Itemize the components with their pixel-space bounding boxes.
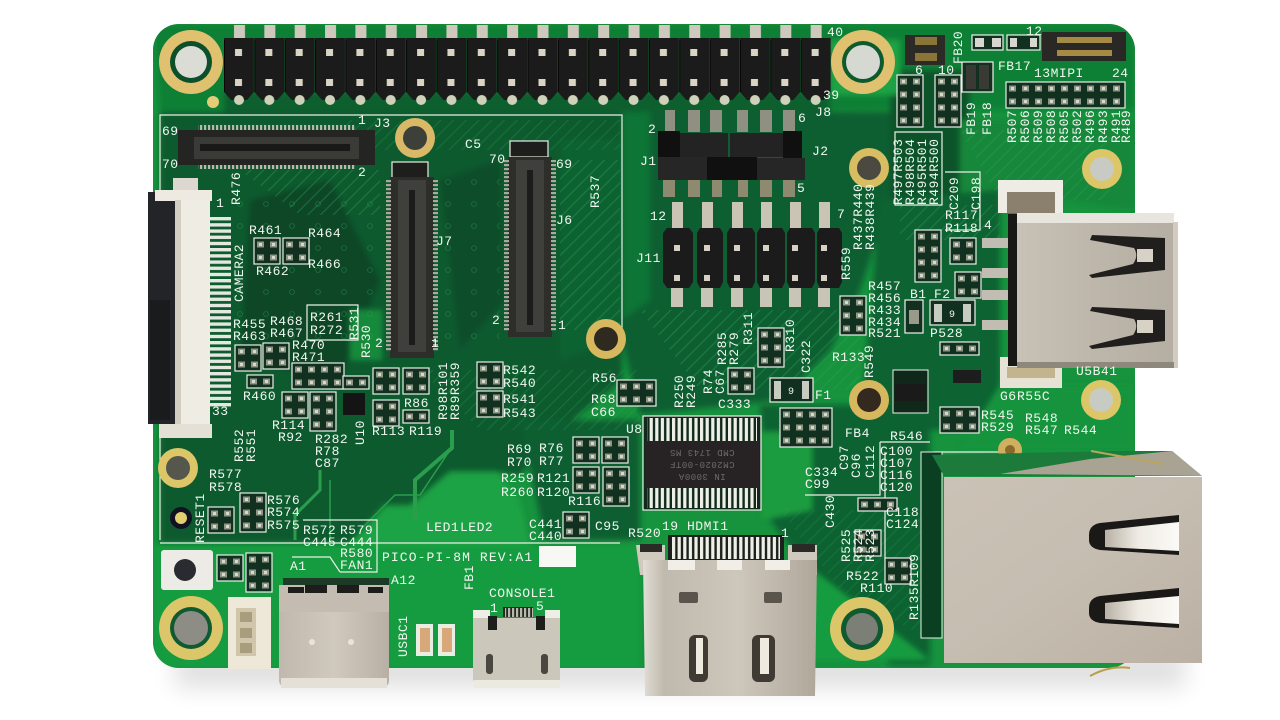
- silkscreen labels: R543: [503, 406, 536, 421]
- silkscreen labels: R120: [537, 485, 570, 500]
- micro-USB console connector: [473, 607, 560, 688]
- USB-A connector: [982, 180, 1178, 388]
- silkscreen labels: R540: [503, 376, 536, 391]
- vertical silkscreen labels: C430: [823, 495, 838, 528]
- silkscreen labels: R542: [503, 363, 536, 378]
- silkscreen labels: FAN1: [340, 558, 373, 573]
- silkscreen labels: R118: [945, 221, 978, 236]
- vertical silkscreen labels: FB20: [951, 31, 966, 64]
- silkscreen labels: 2: [375, 336, 383, 351]
- silkscreen labels: R110: [860, 581, 893, 596]
- silkscreen labels: R119: [409, 424, 442, 439]
- fuses and capacitors: 9: [949, 310, 956, 321]
- silkscreen labels: J7: [436, 234, 453, 249]
- silkscreen labels: R520: [628, 526, 661, 541]
- vertical silkscreen labels: R311: [741, 312, 756, 345]
- silkscreen labels: F1: [815, 388, 832, 403]
- vertical silkscreen labels: R495R501: [915, 139, 930, 205]
- silkscreen labels: R117: [945, 208, 978, 223]
- vertical silkscreen labels: U10: [353, 420, 368, 445]
- silkscreen labels: G6: [1000, 389, 1017, 404]
- connector J6: [504, 141, 556, 337]
- vertical silkscreen labels: R506: [1018, 110, 1033, 143]
- silkscreen labels: R547: [1025, 423, 1058, 438]
- U8 IC chip: [643, 416, 761, 510]
- silkscreen labels: R548: [1025, 411, 1058, 426]
- RJ45 ethernet connector: [921, 451, 1202, 676]
- silkscreen labels: C333: [718, 397, 751, 412]
- silkscreen labels: R272: [310, 323, 343, 338]
- silkscreen labels: C66: [591, 405, 616, 420]
- silkscreen labels: 70: [162, 157, 179, 172]
- silkscreen labels: C116: [880, 468, 913, 483]
- silkscreen labels: 24: [1112, 66, 1129, 81]
- vertical silkscreen labels: C112: [863, 445, 878, 478]
- vertical silkscreen labels: FB18: [980, 102, 995, 135]
- vertical silkscreen labels: R489: [1119, 110, 1134, 143]
- vertical silkscreen labels: R502: [1070, 110, 1085, 143]
- vertical silkscreen labels: C96: [849, 453, 864, 478]
- silkscreen labels: R580: [340, 546, 373, 561]
- vertical silkscreen labels: R249: [684, 375, 699, 408]
- vertical silkscreen labels: RESET1: [193, 493, 208, 543]
- vertical silkscreen labels: USBC1: [396, 615, 411, 657]
- silkscreen labels: 5: [797, 181, 805, 196]
- jumper header J11: [663, 202, 842, 307]
- HDMI connector: [636, 535, 817, 696]
- silkscreen labels: R576: [267, 493, 300, 508]
- silkscreen labels: R77: [539, 454, 564, 469]
- connector J3: [178, 125, 375, 169]
- silkscreen labels: R456: [868, 291, 901, 306]
- silkscreen labels: HDMI1: [687, 519, 729, 534]
- silkscreen labels: R541: [503, 392, 536, 407]
- silkscreen labels: R76: [539, 441, 564, 456]
- vertical silkscreen labels: R285: [715, 332, 730, 365]
- silkscreen labels: F2: [934, 287, 951, 302]
- silkscreen labels: C5: [465, 137, 482, 152]
- vertical silkscreen labels: R505: [1057, 110, 1072, 143]
- fuses and capacitors: 9: [788, 387, 795, 398]
- vertical silkscreen labels: R508: [1044, 110, 1059, 143]
- silkscreen labels: R70: [507, 455, 532, 470]
- silkscreen labels: 19: [662, 519, 679, 534]
- vertical silkscreen labels: [193, 31, 1134, 657]
- silkscreen labels: J3: [374, 116, 391, 131]
- 40-pin GPIO header J8: [224, 24, 831, 108]
- vertical silkscreen labels: C67: [713, 369, 728, 394]
- FPC camera connector: [148, 178, 231, 438]
- silkscreen labels: 1: [558, 318, 566, 333]
- silkscreen labels: [162, 24, 1129, 616]
- silkscreen labels: 2: [492, 313, 500, 328]
- silkscreen labels: R455: [233, 317, 266, 332]
- silkscreen component pads: [208, 75, 1125, 592]
- silkscreen labels: 33: [212, 404, 229, 419]
- USB-C connector: [279, 578, 389, 688]
- U8 IC chip: CM2020-00TF: [670, 459, 734, 469]
- silkscreen labels: R457: [868, 279, 901, 294]
- vertical silkscreen labels: R523: [863, 529, 878, 562]
- vertical silkscreen labels: FB1: [462, 565, 477, 590]
- silkscreen labels: J1: [640, 154, 657, 169]
- silkscreen labels: C120: [880, 480, 913, 495]
- board drop shadow: [175, 650, 1185, 688]
- silkscreen labels: C107: [880, 456, 913, 471]
- silkscreen labels: R577: [209, 467, 242, 482]
- silkscreen labels: A12: [391, 573, 416, 588]
- silkscreen labels: R261: [310, 310, 343, 325]
- vertical silkscreen labels: R496: [1083, 110, 1098, 143]
- silkscreen labels: R521: [868, 326, 901, 341]
- vertical silkscreen labels: R498R504: [903, 139, 918, 205]
- JST fan connector: [228, 597, 271, 669]
- silkscreen labels: R522: [846, 569, 879, 584]
- silkscreen labels: 6: [915, 63, 923, 78]
- U8 IC chip: IN 3000A: [678, 471, 726, 481]
- vertical silkscreen labels: R476: [229, 172, 244, 205]
- silkscreen labels: 40: [827, 25, 844, 40]
- small QFN chips and regulators: [343, 32, 1126, 415]
- silkscreen labels: C124: [886, 517, 919, 532]
- silkscreen labels: R470: [292, 338, 325, 353]
- silkscreen labels: R55C: [1017, 389, 1050, 404]
- silkscreen outlines: [160, 115, 1010, 572]
- vertical silkscreen labels: R507: [1005, 110, 1020, 143]
- vertical silkscreen labels: R509: [1031, 110, 1046, 143]
- mounting hole: bottom right: [830, 597, 894, 661]
- silkscreen labels: FB4: [845, 426, 870, 441]
- silkscreen labels: C334: [805, 465, 838, 480]
- silkscreen labels: R86: [404, 396, 429, 411]
- silkscreen labels: R574: [267, 505, 300, 520]
- silkscreen labels: 1: [781, 526, 789, 541]
- silkscreen labels: R467: [270, 326, 303, 341]
- silkscreen labels: LED2: [460, 520, 493, 535]
- mounting hole: top centre-right: [831, 30, 895, 94]
- silkscreen labels: R471: [292, 350, 325, 365]
- plated holes: [158, 96, 1122, 529]
- silkscreen labels: B1: [910, 287, 927, 302]
- silkscreen labels: 5: [536, 599, 544, 614]
- silkscreen labels: R464: [308, 226, 341, 241]
- vertical silkscreen labels: R250: [672, 375, 687, 408]
- vertical silkscreen labels: C97: [837, 445, 852, 470]
- silkscreen labels: PICO-PI-8M REV:A1: [382, 550, 533, 565]
- silkscreen labels: R113: [372, 424, 405, 439]
- silkscreen labels: U5B41: [1076, 364, 1118, 379]
- silkscreen labels: R572: [303, 523, 336, 538]
- silkscreen labels: C99: [805, 477, 830, 492]
- silkscreen labels: 69: [162, 124, 179, 139]
- silkscreen labels: R69: [507, 442, 532, 457]
- silkscreen labels: 12: [650, 209, 667, 224]
- silkscreen labels: R544: [1064, 423, 1097, 438]
- vertical silkscreen labels: R537: [588, 175, 603, 208]
- silkscreen labels: J6: [556, 213, 573, 228]
- vertical silkscreen labels: C198: [969, 177, 984, 210]
- vertical silkscreen labels: R552: [232, 429, 247, 462]
- vertical silkscreen labels: R493: [1096, 110, 1111, 143]
- vertical silkscreen labels: R74: [701, 369, 716, 394]
- silkscreen labels: R116: [568, 494, 601, 509]
- connector J7: [386, 162, 438, 358]
- silkscreen labels: 1: [358, 113, 366, 128]
- PCB photograph recreated as a scene: [148, 24, 1202, 696]
- silkscreen labels: R68: [591, 392, 616, 407]
- silkscreen labels: 1: [490, 601, 498, 616]
- silkscreen labels: R259: [501, 471, 534, 486]
- silkscreen labels: 12: [1026, 24, 1043, 39]
- vertical silkscreen labels: C322: [799, 340, 814, 373]
- silkscreen labels: R121: [537, 471, 570, 486]
- silkscreen labels: 7: [837, 207, 845, 222]
- mounting hole: top left: [159, 30, 223, 94]
- silkscreen labels: J11: [636, 251, 661, 266]
- silkscreen labels: R461: [249, 223, 282, 238]
- silkscreen labels: R578: [209, 480, 242, 495]
- silkscreen labels: 2: [648, 122, 656, 137]
- silkscreen labels: CONSOLE1: [489, 586, 555, 601]
- vertical silkscreen labels: R98R101: [436, 362, 451, 420]
- silkscreen labels: R575: [267, 518, 300, 533]
- vertical silkscreen labels: R531: [347, 307, 362, 340]
- silkscreen labels: 2: [358, 165, 366, 180]
- silkscreen labels: 70: [489, 152, 506, 167]
- vertical silkscreen labels: R494R500: [927, 139, 942, 205]
- vertical silkscreen labels: C209: [947, 177, 962, 210]
- status LEDs: [416, 624, 455, 656]
- silkscreen labels: R468: [270, 314, 303, 329]
- vertical silkscreen labels: R310: [783, 319, 798, 352]
- vertical silkscreen labels: R438R439: [863, 184, 878, 250]
- vertical silkscreen labels: R279: [727, 332, 742, 365]
- silkscreen labels: FB17: [998, 59, 1031, 74]
- silkscreen labels: R579: [340, 523, 373, 538]
- vertical silkscreen labels: R135R109: [907, 554, 922, 620]
- silkscreen labels: C118: [886, 505, 919, 520]
- vertical silkscreen labels: R551: [244, 429, 259, 462]
- silkscreen labels: R260: [501, 485, 534, 500]
- silkscreen labels: 13MIPI: [1034, 66, 1084, 81]
- vertical silkscreen labels: R525: [839, 529, 854, 562]
- silkscreen labels: U8: [626, 422, 643, 437]
- fuses and capacitors: [770, 300, 975, 402]
- silkscreen labels: R434: [868, 315, 901, 330]
- white label block on board: [539, 546, 576, 567]
- reset push button: [161, 550, 213, 590]
- silkscreen labels: R56: [592, 371, 617, 386]
- silkscreen labels: R92: [278, 430, 303, 445]
- silkscreen labels: R282: [315, 432, 348, 447]
- silkscreen labels: 4: [984, 218, 992, 233]
- vertical silkscreen labels: R559: [839, 247, 854, 280]
- vertical silkscreen labels: R549: [862, 345, 877, 378]
- silkscreen labels: 10: [938, 63, 955, 78]
- trace hatching: [230, 120, 1110, 640]
- silkscreen labels: R462: [256, 264, 289, 279]
- silkscreen labels: P528: [930, 326, 963, 341]
- vertical silkscreen labels: R89R359: [448, 362, 463, 420]
- silkscreen labels: 6: [798, 111, 806, 126]
- silkscreen labels: R546: [890, 429, 923, 444]
- silkscreen labels: C87: [315, 456, 340, 471]
- silkscreen labels: LED1: [426, 520, 459, 535]
- vertical silkscreen labels: R530: [359, 325, 374, 358]
- silkscreen labels: R466: [308, 257, 341, 272]
- silkscreen labels: C444: [340, 535, 373, 550]
- silkscreen labels: R545: [981, 408, 1014, 423]
- copper tone regions: [153, 24, 1135, 668]
- vertical silkscreen labels: R524: [851, 529, 866, 562]
- jumper block J1 J2: [658, 110, 805, 197]
- silkscreen labels: R529: [981, 420, 1014, 435]
- silkscreen labels: 39: [823, 88, 840, 103]
- silkscreen labels: R114: [272, 418, 305, 433]
- PCB board: [153, 24, 1135, 668]
- silkscreen labels: R460: [243, 389, 276, 404]
- silkscreen labels: A1: [290, 559, 307, 574]
- U8 IC chip: CMD 1743 MS: [670, 447, 734, 457]
- silkscreen labels: C95: [595, 519, 620, 534]
- silkscreen labels: C100: [880, 444, 913, 459]
- vertical silkscreen labels: FB19: [964, 102, 979, 135]
- silkscreen labels: C441: [529, 517, 562, 532]
- silkscreen labels: 1: [216, 196, 224, 211]
- vertical silkscreen labels: R497R503: [891, 139, 906, 205]
- silkscreen labels: 69: [556, 157, 573, 172]
- silkscreen labels: R463: [233, 329, 266, 344]
- mounting hole: bottom left: [159, 596, 223, 660]
- silkscreen labels: C445: [303, 535, 336, 550]
- silkscreen labels: C440: [529, 529, 562, 544]
- vertical silkscreen labels: R491: [1109, 110, 1124, 143]
- silkscreen labels: J2: [812, 144, 829, 159]
- silkscreen labels: R133: [832, 350, 865, 365]
- silkscreen labels: J8: [815, 105, 832, 120]
- silkscreen labels: R433: [868, 303, 901, 318]
- vertical silkscreen labels: R437R440: [851, 184, 866, 250]
- vertical silkscreen labels: CAMERA2: [232, 244, 247, 302]
- silkscreen labels: R78: [315, 444, 340, 459]
- silkscreen labels: 1: [431, 336, 439, 351]
